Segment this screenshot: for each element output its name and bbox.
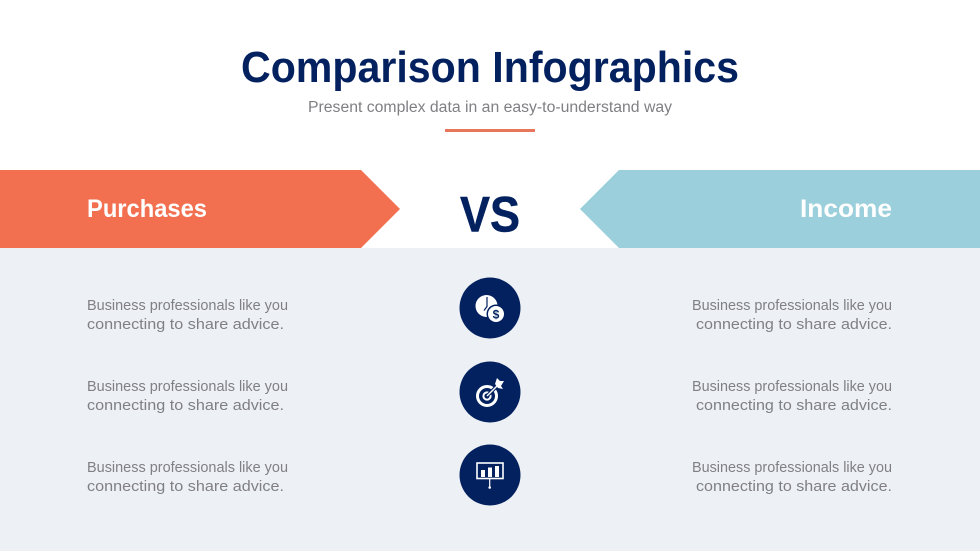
right text block 2: Business professionals like you [692, 378, 892, 395]
right text block 1: connecting to share advice. [696, 316, 892, 333]
panel: content background [0, 248, 980, 551]
left text block 1: connecting to share advice. [87, 316, 284, 333]
right text block 2: connecting to share advice. [696, 397, 892, 414]
left text block 1 [87, 297, 288, 333]
left text block 3 [87, 459, 288, 495]
left text block 3: Business professionals like you [87, 459, 288, 476]
title: Comparison Infographics [241, 43, 739, 92]
icon: clock and dollar coin [460, 278, 520, 338]
right text block 3: Business professionals like you [692, 459, 892, 476]
left text block 3: connecting to share advice. [87, 478, 284, 495]
subtitle: Present complex data in an easy-to-understand way [308, 99, 672, 116]
banner: Income [580, 170, 980, 248]
right text block 1: Business professionals like you [692, 297, 892, 314]
right text block 3 [692, 459, 892, 495]
banner: Purchases [0, 170, 400, 248]
banner: Purchases: Purchases [87, 195, 207, 223]
accent underline [445, 129, 535, 132]
banner: Income: Income [800, 195, 892, 223]
left text block 2: Business professionals like you [87, 378, 288, 395]
right text block 3: connecting to share advice. [696, 478, 892, 495]
icon: clock and dollar coin: $ [493, 308, 500, 322]
icon: target with arrow [460, 362, 520, 422]
left text block 1: Business professionals like you [87, 297, 288, 314]
right text block 1 [692, 297, 892, 333]
left text block 2 [87, 378, 288, 414]
icon: presentation board with bars [460, 444, 520, 506]
left text block 2: connecting to share advice. [87, 397, 284, 414]
VS label: VS [460, 186, 520, 242]
right text block 2 [692, 378, 892, 414]
